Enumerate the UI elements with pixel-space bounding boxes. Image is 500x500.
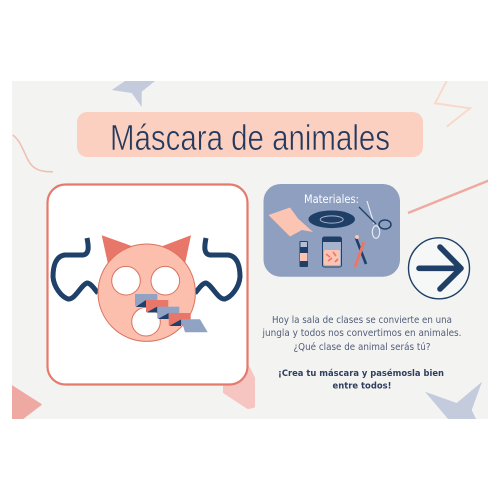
infographic canvas — [12, 81, 488, 419]
panel: mask card — [48, 184, 248, 384]
icon: jar of pieces — [322, 237, 342, 267]
icon: pencils — [355, 235, 366, 267]
decorative shapes — [12, 81, 490, 419]
icon: paper sheet — [268, 208, 313, 236]
materials heading: Materiales: — [304, 192, 359, 206]
call to action: entre todos! — [332, 382, 392, 392]
description text — [262, 315, 462, 353]
description text: jungla y todos nos convertimos en animales. — [262, 328, 462, 339]
description text: Hoy la sala de clases se convierte en una — [272, 315, 452, 326]
arrow button — [408, 238, 470, 299]
mask ears — [102, 235, 191, 264]
icon: paper plate — [308, 210, 355, 228]
ribbon: left — [53, 238, 98, 299]
title banner — [77, 112, 423, 158]
icon: glue stick — [300, 241, 308, 267]
panel: materials — [264, 184, 400, 277]
background panel — [12, 81, 488, 419]
call to action — [278, 368, 444, 392]
call to action: ¡Crea tu máscara y pasémosla bien — [278, 368, 444, 379]
title text: Máscara de animales — [110, 117, 390, 158]
description text: ¿Qué clase de animal serás tú? — [294, 342, 430, 353]
mask face — [98, 244, 195, 341]
paper strips — [135, 294, 208, 332]
ribbon: right — [195, 238, 240, 299]
icon: scissors — [359, 201, 391, 238]
